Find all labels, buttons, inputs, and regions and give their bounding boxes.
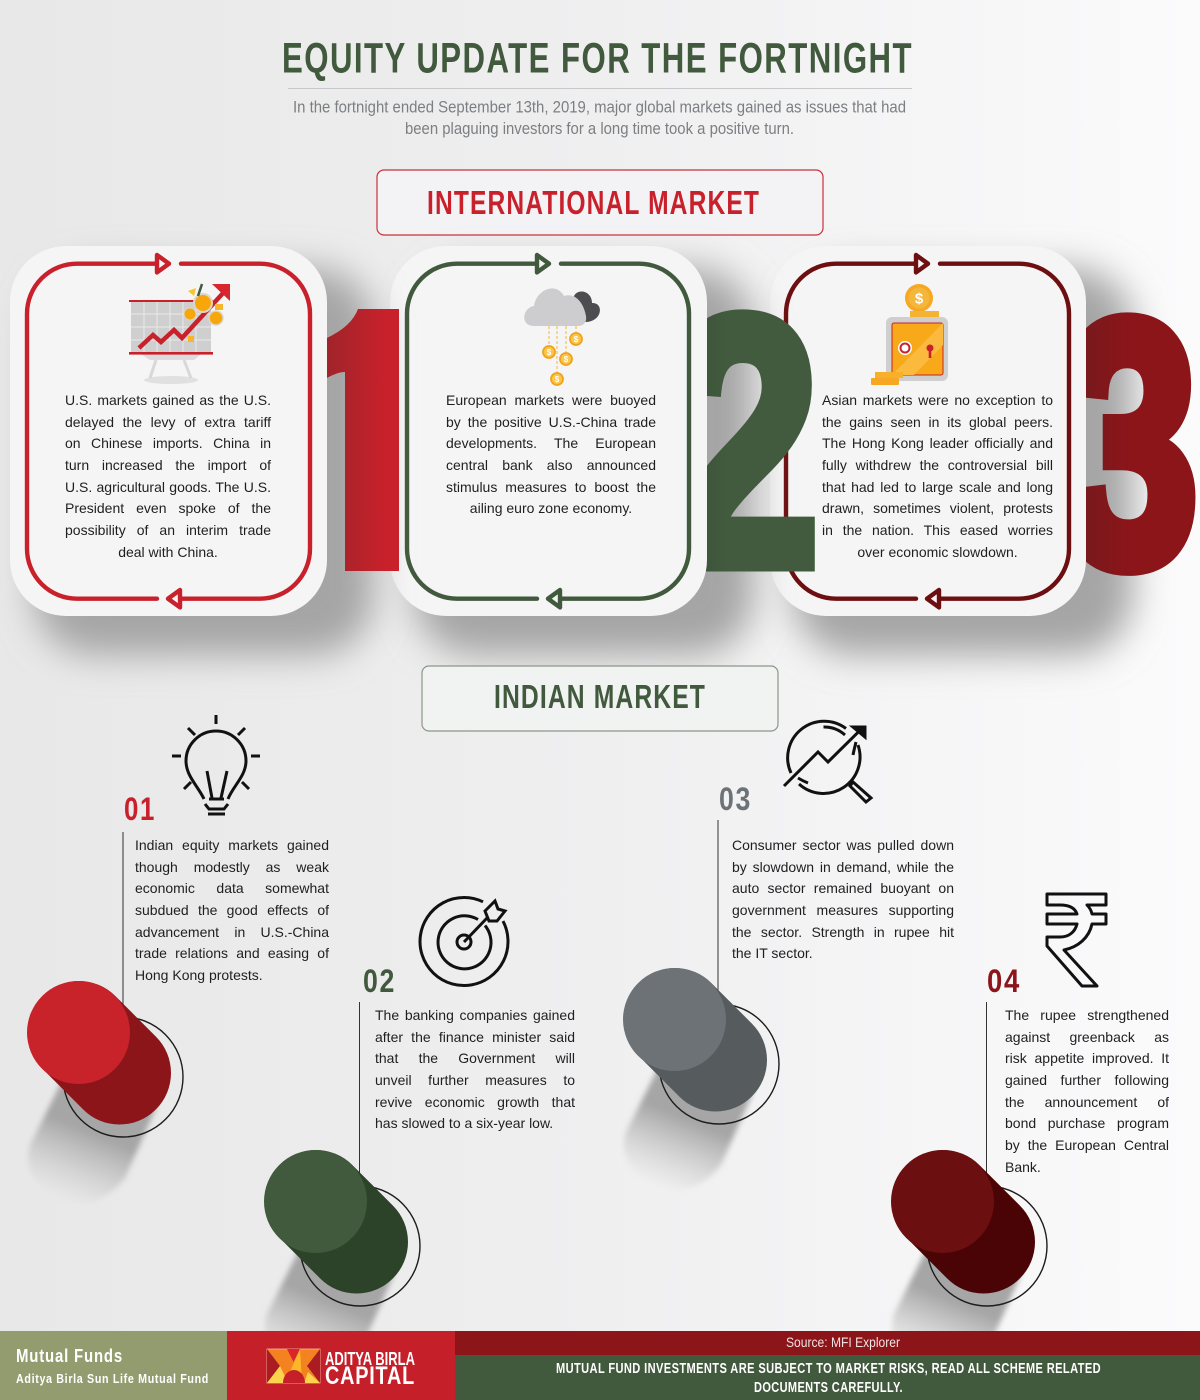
text: asian markets: fully withdrew the controversial bill — [822, 457, 1053, 473]
icon: cloud raining coins: $ — [574, 335, 579, 344]
text: european markets: central bank also announced — [446, 457, 656, 473]
text: indian item 01: though modestly as weak — [135, 859, 329, 875]
title underline — [288, 88, 912, 89]
shadow: card 3 — [793, 268, 1133, 655]
numeral 3: 3 — [1059, 250, 1198, 636]
footer: mutual funds panel — [0, 1331, 227, 1400]
text: u.s. markets: delayed the levy of extra tariff — [65, 414, 271, 430]
pin: item 03 — [623, 968, 779, 1191]
panel: european markets card — [390, 246, 707, 616]
text: u.s. markets: President even spoke of the — [65, 500, 271, 516]
text: indian item 04: The rupee strengthened — [1005, 1007, 1169, 1023]
pin: item 04 — [891, 1150, 1047, 1373]
shadow: card 1 — [34, 268, 374, 655]
text: indian item 04: against greenback as — [1005, 1029, 1169, 1045]
numeral 04: 04 — [987, 963, 1021, 999]
text: indian item 01: subdued the good effects of — [135, 902, 329, 918]
pin: item 01 — [27, 981, 183, 1204]
text: indian item 01: trade relations and easing of — [135, 945, 329, 961]
footer: source bar: Source: MFI Explorer — [786, 1334, 900, 1350]
text: indian item 01 — [135, 837, 330, 983]
icon: cloud raining coins: $ — [547, 348, 552, 357]
footer: source bar — [455, 1331, 1200, 1355]
text: indian item 03: Consumer sector was pulled down — [732, 837, 954, 853]
text: asian markets: the gains seen in its global peers. — [822, 414, 1053, 430]
footer: disclaimer: DOCUMENTS CAREFULLY. — [754, 1380, 903, 1396]
icon: safe with coins — [871, 284, 948, 385]
panel: indian market heading — [422, 666, 778, 731]
icon: presentation board with rising chart — [129, 284, 230, 384]
intro text: In the fortnight ended September 13th, 2019, major global markets gained as issues that had — [293, 98, 906, 116]
text: asian markets: Asian markets were no exception to — [822, 392, 1053, 408]
text: indian item 02: after the finance minister said — [375, 1029, 575, 1045]
pin: item 02 — [264, 1150, 420, 1373]
text: asian markets: that had led to large scale and long — [822, 479, 1053, 495]
text: asian markets: The Hong Kong leader officially and — [822, 435, 1053, 451]
panel: indian market heading: INDIAN MARKET — [494, 678, 706, 715]
text: indian item 01: Hong Kong protests. — [135, 967, 263, 983]
footer: mutual funds panel: Aditya Birla Sun Life Mutual Fund — [16, 1371, 209, 1386]
numeral 2: 2 — [666, 245, 820, 640]
numeral 03: 03 — [719, 781, 752, 817]
text: u.s. markets: on Chinese imports. China in — [65, 435, 271, 451]
text: european markets: European markets were buoyed — [446, 392, 656, 408]
text: u.s. markets — [65, 392, 272, 560]
text: european markets: ailing euro zone economy. — [470, 500, 632, 516]
text: european markets — [446, 392, 656, 516]
text: asian markets: drawn, sometimes violent, protests — [822, 500, 1053, 516]
text: indian item 02: The banking companies gained — [375, 1007, 575, 1023]
text: indian item 01: advancement in U.S.-China — [135, 924, 329, 940]
intro text — [293, 98, 906, 138]
panel: asian markets card — [770, 246, 1086, 616]
text: indian item 04: by the European Central — [1005, 1137, 1169, 1153]
shadow: card 2 — [414, 268, 754, 655]
icon: safe with coins: $ — [915, 290, 924, 308]
icon: cloud raining coins: $ — [555, 375, 560, 384]
text: asian markets: over economic slowdown. — [857, 544, 1018, 560]
text: european markets: developments. The European — [446, 435, 656, 451]
text: european markets: stimulus measures to boost the — [446, 479, 656, 495]
icon: cloud raining coins: $ — [564, 355, 569, 364]
text: indian item 02: that the Government will — [375, 1050, 575, 1066]
text: u.s. markets: U.S. markets gained as the U.S. — [65, 392, 271, 408]
text: indian item 02: unveil further measures to — [375, 1072, 575, 1088]
text: indian item 03: the sector. Strength in rupee hit — [732, 924, 954, 940]
text: u.s. markets: deal with China. — [118, 544, 218, 560]
text: u.s. markets: turn increased the import of — [65, 457, 271, 473]
text: indian item 02 — [375, 1007, 575, 1131]
text: u.s. markets: U.S. agricultural goods. The U.S. — [65, 479, 271, 495]
text: indian item 02: revive economic growth that — [375, 1094, 575, 1110]
text: indian item 02: has slowed to a six-year low. — [375, 1115, 553, 1131]
panel: international market heading: INTERNATIONAL MARKET — [427, 184, 760, 221]
footer: aditya birla capital logo panel: ADITYA BIRLA — [325, 1349, 415, 1369]
panel: international market heading — [377, 170, 823, 235]
text: indian item 04 — [1005, 1007, 1170, 1175]
footer: aditya birla capital logo panel: CAPITAL — [325, 1362, 415, 1390]
text: indian item 04: Bank. — [1005, 1159, 1041, 1175]
footer: aditya birla capital logo panel — [227, 1331, 455, 1400]
text: indian item 03: government measures supporting — [732, 902, 954, 918]
intro text: been plaguing investors for a long time took a positive turn. — [405, 119, 794, 138]
footer: disclaimer — [455, 1355, 1200, 1400]
numeral 1 — [327, 309, 399, 571]
icon: target with arrow — [420, 897, 508, 985]
icon: cloud raining coins — [524, 288, 600, 385]
text: indian item 04: the announcement of — [1005, 1094, 1169, 1110]
title: EQUITY UPDATE FOR THE FORTNIGHT — [282, 34, 913, 82]
text: indian item 03 — [732, 837, 954, 961]
text: indian item 04: risk appetite improved. It — [1005, 1050, 1169, 1066]
text: asian markets: in the nation. This eased worries — [822, 522, 1053, 538]
text: u.s. markets: possibility of an interim trade — [65, 522, 271, 538]
text: european markets: by the positive U.S.-China trade — [446, 414, 656, 430]
text: asian markets — [822, 392, 1053, 560]
icon: magnifier with growth arrow — [784, 721, 871, 802]
numeral 01: 01 — [124, 791, 156, 827]
text: indian item 01: Indian equity markets gained — [135, 837, 329, 853]
text: indian item 03: by slowdown in demand, while the — [732, 859, 954, 875]
text: indian item 03: auto sector remained buoyant on — [732, 880, 954, 896]
text: indian item 03: the IT sector. — [732, 945, 813, 961]
text: indian item 04: gained further following — [1005, 1072, 1169, 1088]
footer: mutual funds panel: Mutual Funds — [16, 1346, 123, 1366]
numeral 02: 02 — [363, 963, 396, 999]
icon: light bulb — [172, 715, 260, 814]
text: indian item 04: bond purchase program — [1005, 1115, 1169, 1131]
panel: u.s. markets card — [10, 246, 327, 616]
numeral 1: 1 — [262, 234, 467, 645]
text: indian item 01: economic data somewhat — [135, 880, 329, 896]
icon: rupee symbol — [1047, 894, 1106, 986]
